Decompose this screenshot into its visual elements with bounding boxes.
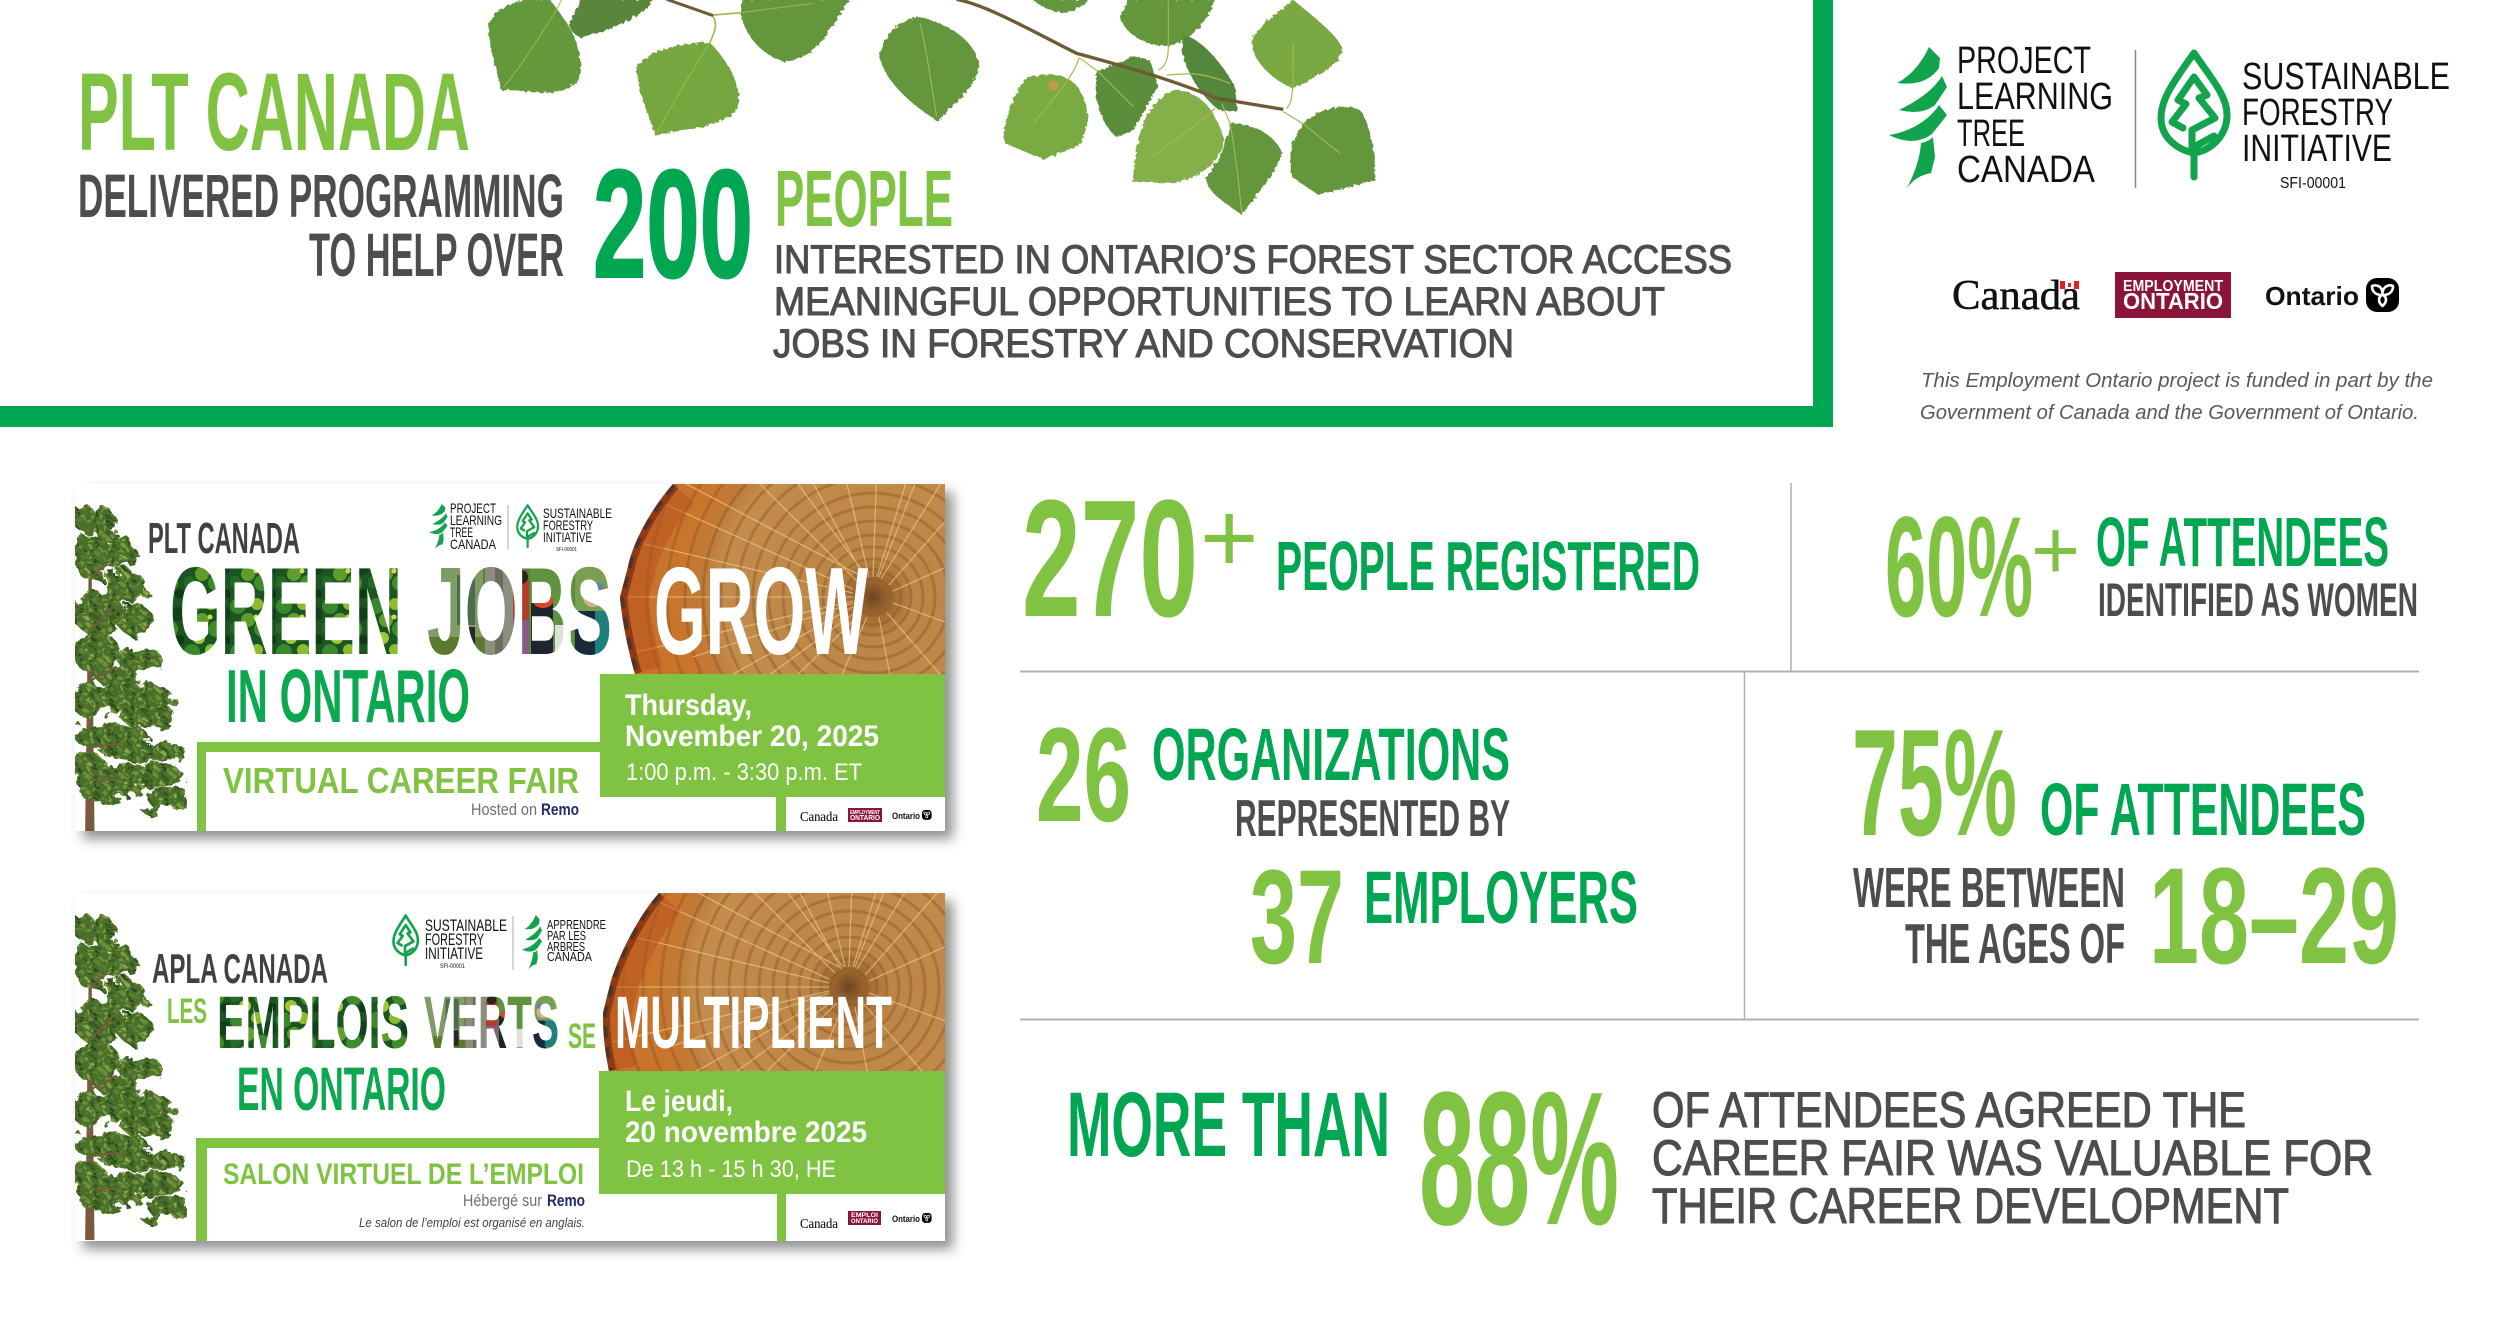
logo: Project Learning Tree Canada: PROJECT [1957, 40, 2091, 82]
in Ontario: IN ONTARIO [226, 654, 470, 738]
stat: more than 88%: THEIR CAREER DEVELOPMENT [1652, 1178, 2289, 1234]
wood slice image [620, 484, 945, 674]
delivered programming text: DELIVERED PROGRAMMING [78, 162, 564, 230]
funder logos small: ONTARIO [851, 1219, 878, 1225]
headline Les emplois verts se multiplient: EMPLOIS [217, 981, 409, 1064]
headline Green Jobs Grow: GREEN [170, 543, 402, 681]
funder logos small [800, 1211, 932, 1232]
leaves left group [488, 0, 848, 136]
virtual career fair: VIRTUAL CAREER FAIR [223, 760, 579, 801]
funding note: This Employment Ontario project is funded in part by the [1921, 369, 2433, 392]
date box [599, 1071, 945, 1194]
logos small: CANADA [547, 949, 592, 964]
description text: INTERESTED IN ONTARIO’S FOREST SECTOR ACCESS [774, 238, 1732, 282]
stat: 75% ages 18-29: WERE BETWEEN [1853, 856, 2125, 920]
funder logos small [800, 808, 932, 825]
panel: English event banner [74, 484, 962, 848]
salon virtuel: SALON VIRTUEL DE L’EMPLOI [223, 1158, 584, 1191]
funder logos small: Ontario [892, 1214, 920, 1224]
logo: Project Learning Tree Canada: CANADA [1957, 149, 2096, 191]
green frame [196, 1138, 599, 1241]
logo: Canada wordmark: Canada [1952, 273, 2080, 319]
logo: Project Learning Tree Canada [1889, 40, 2113, 191]
event organizer name: APLA CANADA [152, 945, 328, 992]
hosted on Remo: Hosted on [471, 800, 537, 819]
date box: Le jeudi, [625, 1085, 733, 1118]
hosted on Remo: Remo [541, 800, 579, 819]
logos small: LEARNING [450, 512, 502, 528]
headline Green Jobs Grow [170, 543, 868, 681]
logos small: CANADA [450, 536, 497, 552]
stat: 75% ages 18-29 [1852, 698, 2399, 993]
headline Les emplois verts se multiplient: MULTIPLIENT [615, 981, 892, 1064]
stat: 270+ registered [1022, 466, 1700, 652]
date box [600, 674, 945, 797]
stat: 75% ages 18-29: 75% [1852, 698, 2017, 868]
header panel with green frame [0, 0, 1833, 427]
date box: 1:00 p.m. - 3:30 p.m. ET [626, 759, 862, 786]
green frame [197, 742, 600, 831]
stat: 60%+ women [1885, 488, 2418, 647]
logo panel [1889, 40, 2450, 424]
logos small: SUSTAINABLE [543, 505, 612, 521]
headline Les emplois verts se multiplient: LES [167, 992, 207, 1031]
logos small [429, 500, 612, 553]
stat: 26 organizations 37 employers: EMPLOYERS [1364, 856, 1638, 939]
wood slice image [603, 893, 945, 1071]
event organizer name: PLT CANADA [148, 514, 300, 563]
stat: 270+ registered: 270 [1022, 466, 1198, 652]
funder logos small: Ontario [892, 811, 920, 821]
logo: Ontario: Ontario [2265, 281, 2359, 311]
stat: 270+ registered: PEOPLE REGISTERED [1276, 527, 1700, 605]
funding note: Government of Canada and the Government of Ontario. [1920, 401, 2419, 424]
stat: 270+ registered: + [1200, 482, 1258, 594]
headline Green Jobs Grow: GROW [654, 543, 868, 681]
stat: more than 88%: 88% [1419, 1053, 1619, 1265]
200 figure: 200 [593, 138, 753, 310]
stat: 26 organizations 37 employers: 37 [1250, 843, 1344, 992]
delivered programming text: TO HELP OVER [309, 221, 564, 289]
logo: Sustainable Forestry Initiative: SFI-00001 [2280, 175, 2346, 192]
logo: Sustainable Forestry Initiative: SUSTAINABLE [2242, 56, 2450, 98]
logos small: PAR LES [547, 928, 586, 943]
logos small: SFI-00001 [440, 964, 466, 970]
logos small: PROJECT [450, 500, 496, 516]
logos small: APPRENDRE [547, 917, 606, 932]
logo: Project Learning Tree Canada: LEARNING [1957, 76, 2113, 118]
funder logos small: EMPLOI [851, 1213, 878, 1219]
language note: Le salon de l’emploi est organisé en anglais. [359, 1215, 585, 1230]
people heading: PEOPLE [775, 154, 953, 243]
stat: more than 88%: MORE THAN [1067, 1074, 1390, 1176]
logo: Project Learning Tree Canada: TREE [1957, 113, 2025, 155]
funder logos small: ONTARIO [850, 815, 881, 822]
logos small: SUSTAINABLE [425, 916, 507, 935]
leaves right group [879, 0, 1375, 215]
panel: statistics [1020, 466, 2419, 1265]
funder logos small: Canada [800, 1217, 839, 1232]
funder logos small: Canada [800, 810, 839, 825]
headline Green Jobs Grow: JOBS [427, 543, 612, 681]
description text: JOBS IN FORESTRY AND CONSERVATION [773, 322, 1514, 366]
hosted on Remo French: Remo [547, 1191, 585, 1210]
headline Les emplois verts se multiplient: VERTS [424, 981, 559, 1064]
title PLT Canada: PLT CANADA [78, 51, 470, 174]
date box: 20 novembre 2025 [625, 1116, 867, 1149]
description text: MEANINGFUL OPPORTUNITIES TO LEARN ABOUT [774, 280, 1665, 324]
logo: Sustainable Forestry Initiative [2161, 53, 2450, 192]
stat: 60%+ women: + [2031, 503, 2080, 597]
logos small: FORESTRY [425, 930, 484, 949]
delivered programming text [78, 162, 564, 289]
funder logos small: EMPLOYMENT [850, 810, 880, 816]
logos small: ARBRES [547, 939, 585, 954]
en Ontario: EN ONTARIO [237, 1055, 446, 1123]
stat: 75% ages 18-29: THE AGES OF [1905, 912, 2125, 976]
logo: Employment Ontario: ONTARIO [2123, 288, 2223, 314]
logos small: INITIATIVE [425, 944, 483, 963]
stat: more than 88%: CAREER FAIR WAS VALUABLE FOR [1652, 1130, 2373, 1186]
date box: November 20, 2025 [625, 720, 879, 753]
logo: Sustainable Forestry Initiative: FORESTRY [2242, 92, 2393, 134]
stat: 60%+ women: 60% [1885, 488, 2033, 647]
pine tree [71, 504, 191, 831]
logos small: FORESTRY [543, 517, 593, 533]
stat: more than 88%: OF ATTENDEES AGREED THE [1652, 1082, 2246, 1138]
logos small: TREE [450, 524, 473, 540]
date box: Thursday, [625, 689, 752, 722]
leafy branch illustration [488, 0, 1375, 215]
headline Les emplois verts se multiplient: SE [568, 1017, 596, 1056]
stat: 26 organizations 37 employers: REPRESENTED BY [1235, 790, 1510, 848]
logos small: INITIATIVE [543, 529, 592, 545]
logo: Employment Ontario [2115, 272, 2231, 318]
funding note [1920, 369, 2433, 424]
stat: 26 organizations 37 employers: 26 [1036, 701, 1131, 850]
logo: Employment Ontario: EMPLOYMENT [2123, 278, 2223, 295]
logos small: SFI-00001 [556, 547, 577, 553]
description text [773, 238, 1732, 366]
stat: 26 organizations 37 employers: ORGANIZATIONS [1152, 713, 1510, 796]
logo: Ontario [2265, 278, 2399, 312]
logos small [393, 915, 606, 970]
stat: more than 88% [1067, 1053, 2373, 1265]
logo: Sustainable Forestry Initiative: INITIATIVE [2242, 128, 2392, 170]
panel: French event banner [74, 892, 962, 1258]
hosted on Remo French: Hébergé sur [463, 1191, 542, 1210]
stat: 26 organizations 37 employers [1036, 701, 1638, 992]
date box: De 13 h - 15 h 30, HE [626, 1156, 836, 1183]
green frame border [0, 0, 1833, 427]
pine tree [71, 913, 191, 1240]
headline Les emplois verts se multiplient [167, 981, 892, 1064]
